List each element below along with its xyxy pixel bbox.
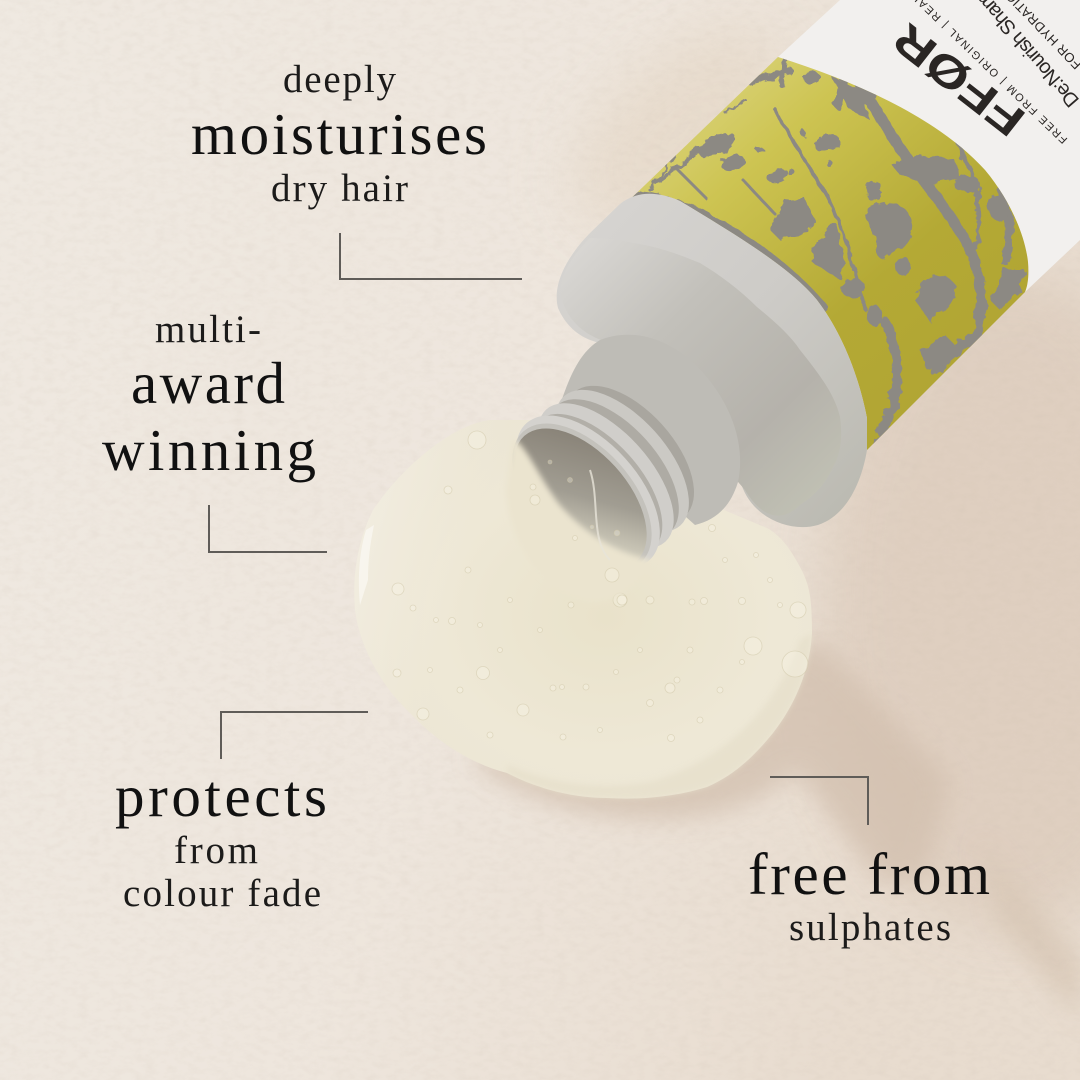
puddle shadow	[470, 640, 950, 880]
callout text	[102, 308, 316, 483]
callout connector	[221, 712, 368, 759]
callout text: dry hair	[271, 167, 408, 210]
callout: free from sulphates	[748, 777, 990, 949]
tube white body	[778, 0, 1080, 292]
callout text: colour fade	[123, 872, 321, 915]
callout connector	[209, 505, 327, 552]
callout: deeply moisturises dry hair	[191, 58, 522, 279]
brand logo: FFØR	[884, 14, 1034, 146]
callout text: free from	[748, 841, 990, 907]
callout text	[115, 763, 327, 915]
callout text: deeply	[283, 58, 396, 101]
callout connector	[340, 233, 522, 279]
callout text: award	[131, 350, 285, 416]
callout text	[191, 58, 487, 210]
callout text: from	[174, 829, 258, 872]
neck	[560, 335, 740, 525]
shampoo puddle	[354, 420, 812, 799]
gel stream from mouth	[506, 438, 652, 605]
tube mouth interior	[489, 404, 672, 592]
callout text: moisturises	[191, 101, 487, 167]
yellow patterned band	[632, 57, 1028, 450]
threads	[483, 356, 724, 599]
callout text	[748, 841, 990, 949]
callout connector	[770, 777, 868, 825]
callout text: protects	[115, 763, 327, 829]
cap	[557, 194, 867, 527]
callout: protects from colour fade	[115, 712, 368, 915]
bubbles in puddle	[392, 431, 808, 742]
callout text: winning	[102, 417, 316, 483]
callout: multi-award winning	[102, 308, 327, 552]
callout text: multi-	[155, 308, 261, 351]
product tube	[515, 0, 1080, 561]
callout text: sulphates	[789, 906, 951, 949]
